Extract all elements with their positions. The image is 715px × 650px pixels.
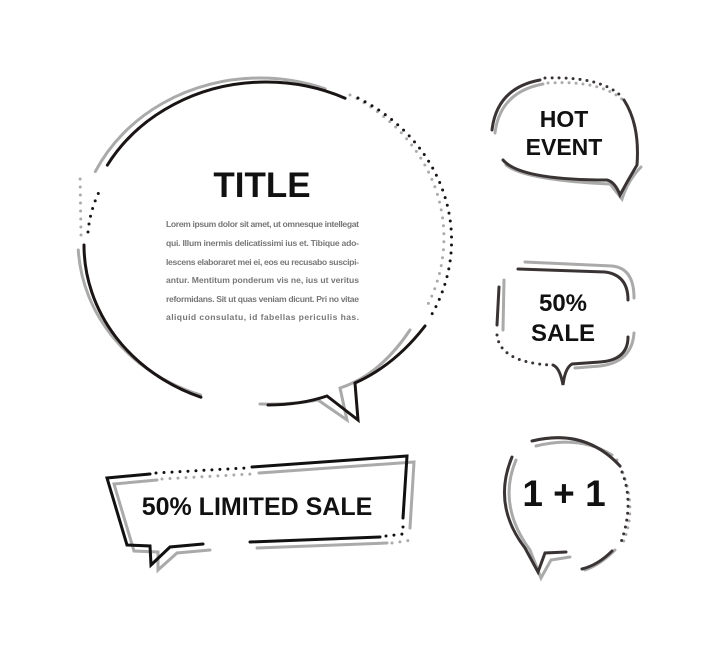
gray outline	[78, 78, 444, 420]
title: TITLE	[213, 166, 311, 205]
text: hot event: EVENT	[526, 134, 602, 160]
banner label: 50% LIMITED SALE	[142, 493, 372, 521]
body text: qui. Illum inermis delicatissimi ius et. Tibique ado-	[166, 238, 359, 248]
panel: 50% sale bubble	[497, 262, 634, 385]
text: 50% sale	[531, 290, 595, 347]
text: hot event	[526, 106, 602, 160]
body text: Lorem ipsum dolor sit amet, ut omnesque intellegat	[166, 219, 359, 229]
body text: lescens elaboraret mei ei, eos eu recusabo suscipi-	[166, 257, 359, 267]
text: 50% sale: SALE	[531, 320, 595, 347]
body text: reformidans. Sit ut quas veniam dicunt. Pri no vitae	[166, 294, 359, 304]
text: 1+1: 1 + 1	[522, 473, 606, 514]
panel: limited sale banner	[107, 456, 414, 570]
panel: main speech bubble	[78, 78, 452, 420]
body text	[166, 219, 359, 322]
text: 50% sale: 50%	[539, 290, 587, 317]
body text: aliquid consulatu, id fabellas periculis has.	[166, 312, 359, 322]
panel: 1+1 bubble	[504, 438, 630, 578]
body text: antur. Mentitum ponderum vis ne, ius ut veritus	[166, 275, 359, 285]
text: hot event: HOT	[540, 106, 588, 132]
black outline	[84, 82, 452, 420]
panel: hot event bubble	[492, 78, 641, 199]
